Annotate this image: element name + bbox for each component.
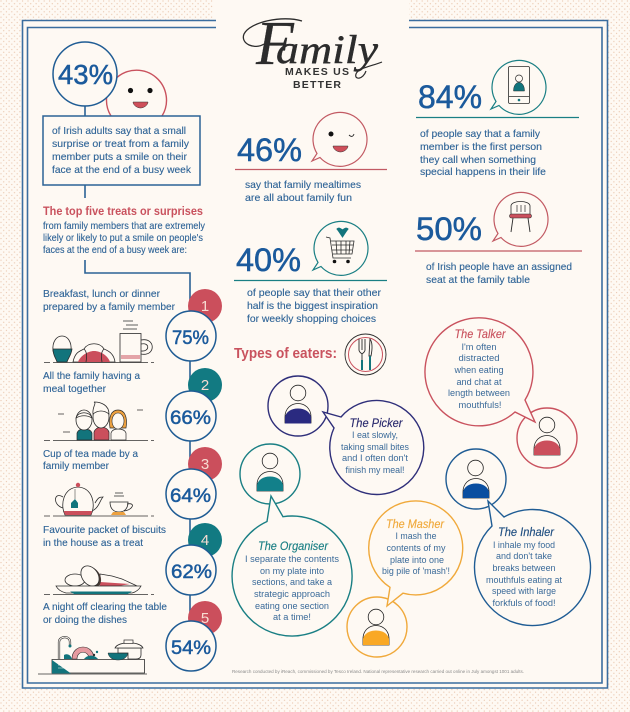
item 5: clearing the table: 5 [201,610,209,627]
stat: 50%: seat at the family table [426,275,530,286]
avatar: talker [517,408,577,468]
stat: 46%: say that family mealtimes [245,180,361,191]
stat: 50% [415,192,582,286]
eater: The Inhaler: mouthfuls eating at [486,575,562,586]
item 2: family meal: 66% [170,408,211,429]
avatar: inhaler [446,449,506,509]
eater: The Masher: contents of my [386,543,446,554]
eater: The Masher [347,501,463,657]
stat: 40%: of people say that their other [247,288,382,299]
stat: 84% [416,60,579,178]
eater: The Talker: and chat at [456,377,502,388]
eater: The Organiser: at a time! [273,612,311,623]
eater: The Picker: finish my meal! [346,465,404,476]
icon: mug [120,321,152,362]
eater: The Organiser: eating one section [255,601,329,612]
eater: The Inhaler: I inhale my food [493,540,555,551]
eater: The Organiser: I separate the contents [245,554,339,565]
eater: The Talker: mouthfuls! [458,400,502,411]
stat: 43% [43,42,200,198]
stat: 46%: are all about family fun [245,193,352,204]
eater: The Talker: when eating [454,365,504,376]
stat: 40%: 40% [236,242,301,278]
icon: chair speech bubble [493,192,548,246]
avatar: masher [347,597,407,657]
eater: The Organiser: The Organiser [258,541,329,553]
eater: The Organiser: on my plate into [260,566,324,577]
stat: 46% [235,112,387,204]
title [243,10,382,91]
item 5: clearing the table: 54% [171,638,211,659]
stat: 40% [234,221,387,325]
eater: The Organiser [232,444,352,636]
item 4: biscuits: 62% [171,562,212,583]
heading: top five treats: The top five treats or surprises [43,204,203,218]
eater: The Organiser: strategic approach [254,589,330,600]
item 4: biscuits: 4 [201,532,209,549]
item 5: clearing the table [38,601,222,674]
stat: 46%: 46% [237,132,302,168]
eater: The Inhaler: forkfuls of food! [492,598,556,609]
item 1: breakfast: 1 [201,298,209,315]
item 3: cup of tea [43,447,222,519]
stat: 84%: member is the first person [420,142,542,153]
title: F [255,10,295,78]
eater: The Talker: The Talker [454,329,507,341]
item 1: breakfast: Breakfast, lunch or dinner [43,289,161,300]
icon: croissant [73,344,115,362]
stat: 50%: of Irish people have an assigned [426,262,572,273]
stat: 84%: special happens in their life [420,167,546,178]
stat: 43%: surprise or treat from a family [52,139,190,150]
stat: 40%: for weekly shopping choices [247,314,376,325]
eater: The Picker: I eat slowly, [352,430,398,441]
icon: shopping trolley speech bubble [313,221,368,275]
eater: The Inhaler: speed with large [492,586,556,597]
avatar: organiser [240,444,300,504]
eater: The Inhaler [446,449,591,626]
title: amily [276,27,378,72]
eater: The Inhaler: The Inhaler [498,527,555,539]
item 2: family meal: 2 [201,377,209,394]
item 4: biscuits: in the house as a treat [43,538,143,549]
eater: The Masher: big pile of 'mash'! [382,566,450,577]
item 4: biscuits: Favourite packet of biscuits [43,525,166,536]
item 3: cup of tea: Cup of tea made by a [43,449,138,460]
item 2: family meal: meal together [43,384,107,395]
item 3: cup of tea: family member [43,461,110,472]
stat: 84%: of people say that a family [420,129,541,140]
eater: The Picker [268,376,424,494]
eater: The Talker: I'm often [462,342,496,353]
intro text: likely or likely to put a smile on people's [43,233,203,244]
icon: egg cup [53,336,72,362]
stat: 84%: they call when something [420,155,536,166]
eater: The Picker: The Picker [350,418,404,430]
eater: The Picker: and I often don't [342,453,408,464]
eater: The Inhaler: breaks between [492,563,556,574]
footnote: Research conducted by iReach, commissioned by Tesco Ireland. National representative research carried out online in July amongst 1001 adults. [232,669,524,674]
eater: The Inhaler: and don't take [496,551,552,562]
item 2: family meal: All the family having a [43,371,140,382]
eater: The Masher: plate into one [390,555,444,566]
intro text [43,221,206,256]
eater: The Organiser: sections, and take a [252,577,333,588]
eater: The Masher: The Masher [386,519,445,531]
stat: 50%: 50% [416,211,482,247]
icon: sink with dishes [52,637,144,674]
eater: The Masher: I mash the [396,531,436,542]
icon: teacup [110,493,132,515]
item 4: biscuits [43,523,222,595]
icon: family of three [76,402,127,440]
intro text: from family members that are extremely [43,221,206,232]
item 5: clearing the table: A night off clearing the table [43,602,167,613]
icon: plate and cutlery [345,334,386,375]
icon: winking speech bubble [312,112,367,166]
stat: 43%: face at the end of a busy week [52,165,192,176]
eater: The Talker: length between [448,388,510,399]
icon: teapot [55,483,103,515]
intro text: faces at the end of a busy week are: [43,245,187,256]
item 3: cup of tea: 3 [201,456,209,473]
eater: The Talker [425,318,577,468]
item 2: family meal [43,368,222,441]
icon: phone speech bubble [491,60,546,114]
icon: plate of biscuits [56,562,141,594]
heading: types of eaters: Types of eaters: [234,346,337,362]
item 1: breakfast: 75% [172,328,209,349]
item 5: clearing the table: or doing the dishes [43,615,127,626]
item 1: breakfast [43,289,222,362]
eater: The Picker: taking small bites [341,442,409,453]
stat: 43%: member puts a smile on their [52,152,188,163]
stat: 40%: half is the biggest inspiration [247,301,378,312]
timeline connector [85,260,190,630]
eater: The Talker: distracted [458,353,500,364]
stat: 43%: of Irish adults say that a small [52,126,186,137]
item 3: cup of tea: 64% [170,486,211,507]
item 1: breakfast: prepared by a family member [43,302,176,313]
title: MAKES US [285,66,349,78]
stat: 43%: 43% [58,59,113,90]
avatar: picker [268,376,328,436]
stat: 84%: 84% [418,79,482,115]
title: BETTER [293,79,341,91]
